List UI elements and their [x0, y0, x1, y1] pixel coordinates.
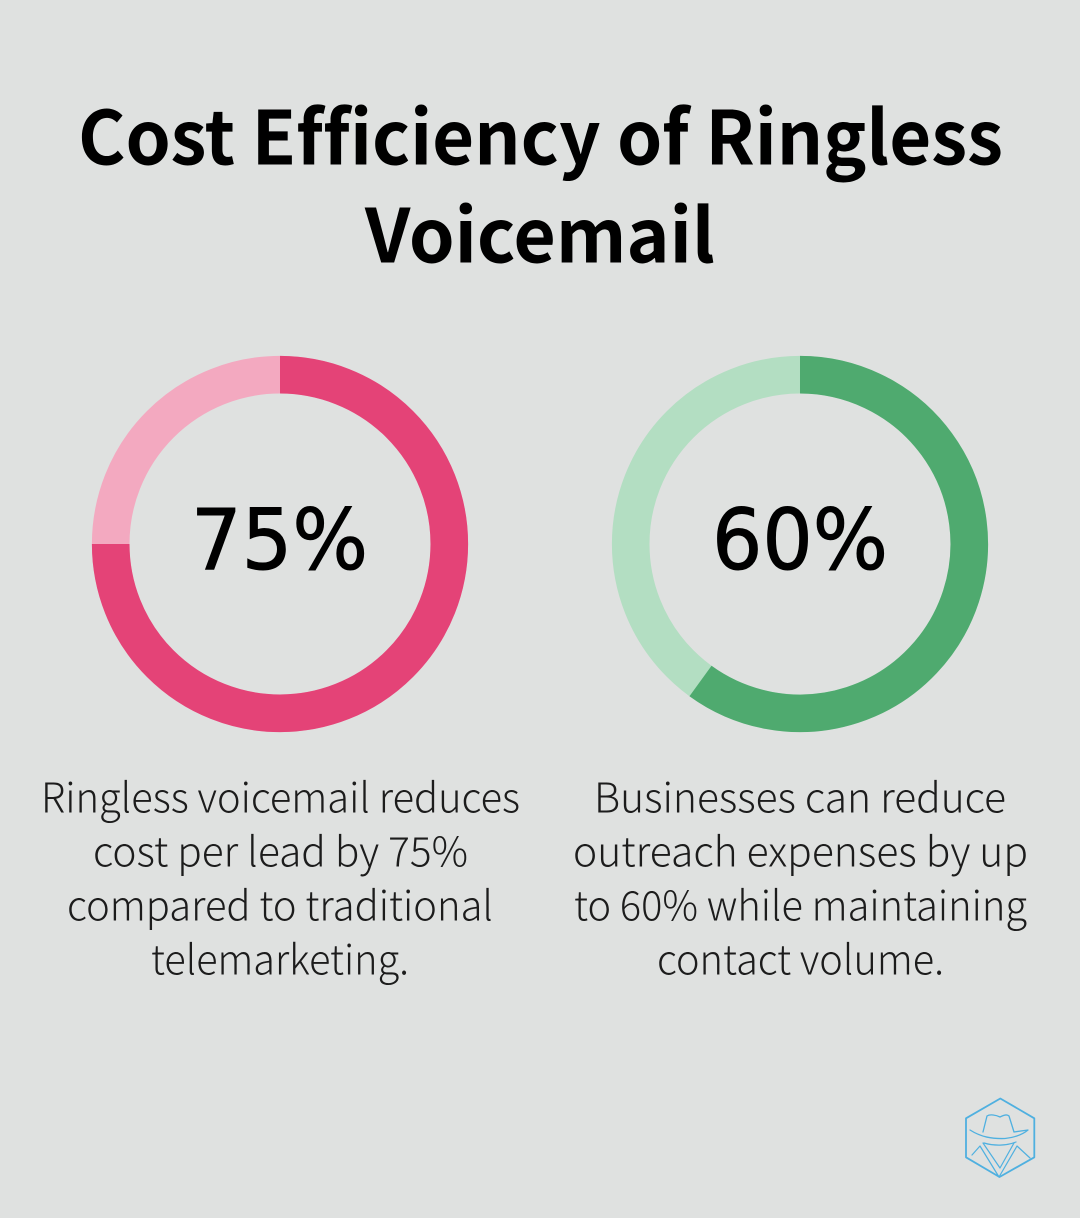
description: 75%: Ringless voicemail reduces [41, 764, 520, 824]
description: 60%: Businesses can reduce [594, 764, 1006, 824]
description: 60%: contact volume. [657, 926, 944, 986]
donut chart: 75% [111, 375, 449, 713]
description: 75% [41, 764, 520, 986]
panel: 75% cost per lead [41, 375, 520, 986]
title: Voicemail [364, 178, 715, 284]
icon: logo hexagon with hat figure [966, 1098, 1034, 1177]
donut chart: 60% [631, 375, 969, 713]
panel: 60% outreach expenses [573, 375, 1028, 986]
description: 60%: to 60% while maintaining [574, 872, 1027, 932]
value: 60%: 60% [712, 491, 888, 589]
title: Cost Efficiency of Ringless [78, 80, 1003, 186]
value: 75%: 75% [191, 491, 368, 589]
description: 75%: compared to traditional [67, 872, 493, 932]
description: 75%: cost per lead by 75% [93, 818, 468, 878]
description: 60%: outreach expenses by up [573, 818, 1028, 878]
description: 60% [573, 764, 1028, 986]
description: 75%: telemarketing. [151, 926, 409, 986]
title [78, 80, 1003, 284]
